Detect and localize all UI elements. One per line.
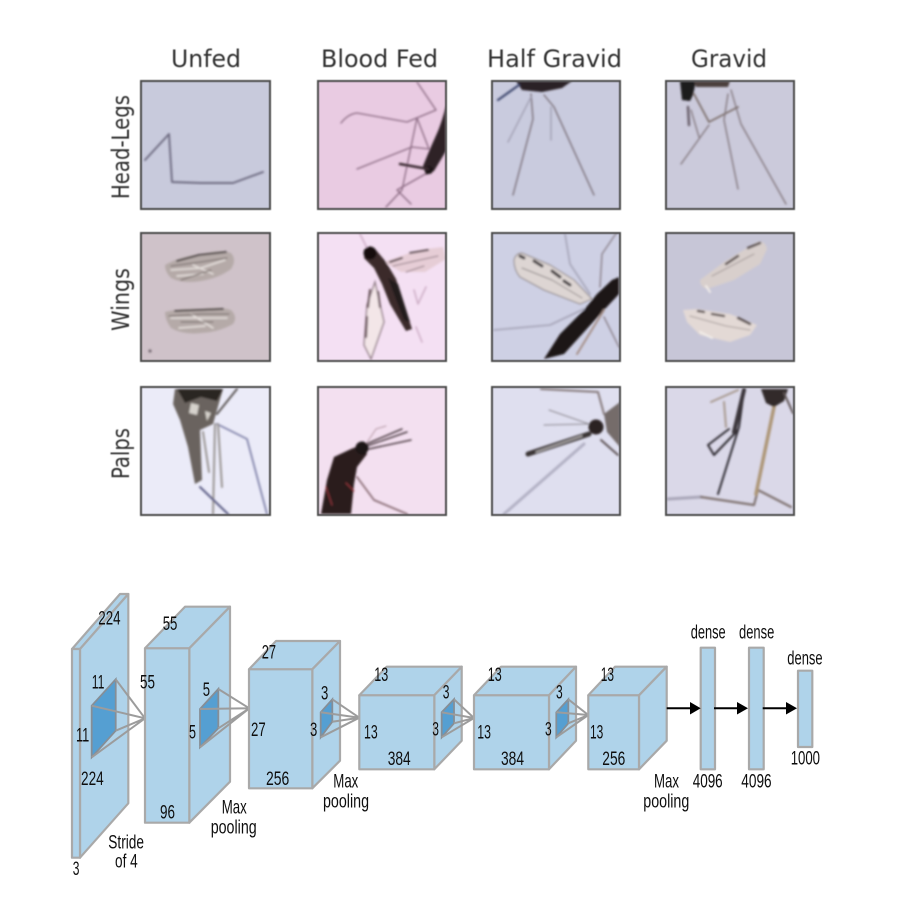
dimension labels: 55 xyxy=(163,613,177,635)
panel: half gravid head-legs xyxy=(492,81,620,209)
dimension labels: 3 xyxy=(321,682,328,704)
row labels xyxy=(107,95,135,479)
panel: gravid head-legs xyxy=(666,81,794,209)
dimension labels: 4096 xyxy=(693,771,723,793)
dimension labels: 384 xyxy=(501,748,524,770)
column headings xyxy=(171,45,767,73)
dimension labels: 27 xyxy=(251,719,266,741)
column headings: Unfed xyxy=(171,45,241,73)
row labels: Palps xyxy=(107,428,135,479)
operation labels: dense xyxy=(739,621,774,643)
dimension labels: 13 xyxy=(374,664,388,686)
column headings: Blood Fed xyxy=(321,45,438,73)
operation labels: Max xyxy=(222,796,247,818)
dimension labels: 256 xyxy=(266,768,289,790)
operation labels: pooling xyxy=(643,791,689,813)
panel: blood fed palps xyxy=(318,387,446,515)
dimension labels: 13 xyxy=(364,721,378,743)
column headings: Half Gravid xyxy=(487,45,622,73)
operation labels: pooling xyxy=(323,791,369,813)
dimension labels: 55 xyxy=(140,671,155,693)
panel: unfed head-legs xyxy=(141,81,270,209)
dimension labels: 256 xyxy=(602,748,625,770)
layer 4: convolution volume xyxy=(359,667,474,769)
panel: gravid palps xyxy=(666,387,794,515)
panel: blood fed wings xyxy=(318,232,446,362)
operation labels: Max xyxy=(333,771,358,793)
dimension labels xyxy=(73,607,820,880)
layer 5: convolution volume xyxy=(474,667,588,769)
operation labels: Stride xyxy=(108,831,144,853)
operation labels: dense xyxy=(691,621,726,643)
network diagram xyxy=(72,594,823,880)
layer 1: input volume xyxy=(72,594,145,858)
dimension labels: 3 xyxy=(432,719,439,741)
panel: unfed palps xyxy=(141,387,270,515)
panel: half gravid wings xyxy=(492,232,620,362)
layer 3: convolution volume xyxy=(249,641,359,788)
dimension labels: 13 xyxy=(477,721,491,743)
layer 6: convolution volume xyxy=(588,667,667,769)
operation labels: pooling xyxy=(211,816,257,838)
operation labels: Max xyxy=(654,771,679,793)
arrows xyxy=(667,702,797,714)
dimension labels: 96 xyxy=(160,801,175,823)
column headings: Gravid xyxy=(691,45,767,73)
dimension labels: 3 xyxy=(443,681,449,703)
dimension labels: 3 xyxy=(73,858,79,880)
panel: blood fed head-legs xyxy=(318,81,446,209)
dimension labels: 13 xyxy=(590,721,603,743)
panel: half gravid palps xyxy=(492,387,620,515)
layer 2: convolution volume xyxy=(145,607,249,823)
operation labels: dense xyxy=(787,647,823,669)
dimension labels: 1000 xyxy=(791,747,820,769)
dimension labels: 13 xyxy=(601,664,614,686)
dimension labels: 3 xyxy=(310,719,317,741)
dimension labels: 3 xyxy=(545,719,552,741)
row labels: Wings xyxy=(107,268,135,331)
dimension labels: 5 xyxy=(189,721,196,743)
operation labels xyxy=(108,621,823,873)
dimension labels: 13 xyxy=(488,664,502,686)
dimension labels: 11 xyxy=(76,725,89,747)
operation labels: of 4 xyxy=(115,851,138,873)
dimension labels: 224 xyxy=(81,768,104,790)
dimension labels: 3 xyxy=(556,681,563,703)
dense layers xyxy=(701,648,812,769)
dimension labels: 4096 xyxy=(741,771,772,793)
dimension labels: 384 xyxy=(388,748,411,770)
panel: unfed wings xyxy=(141,232,270,362)
row labels: Head-Legs xyxy=(107,95,135,199)
dimension labels: 27 xyxy=(262,641,276,663)
dimension labels: 5 xyxy=(203,679,210,701)
dimension labels: 11 xyxy=(92,671,104,693)
panel: gravid wings xyxy=(666,232,794,362)
dimension labels: 224 xyxy=(98,607,121,629)
